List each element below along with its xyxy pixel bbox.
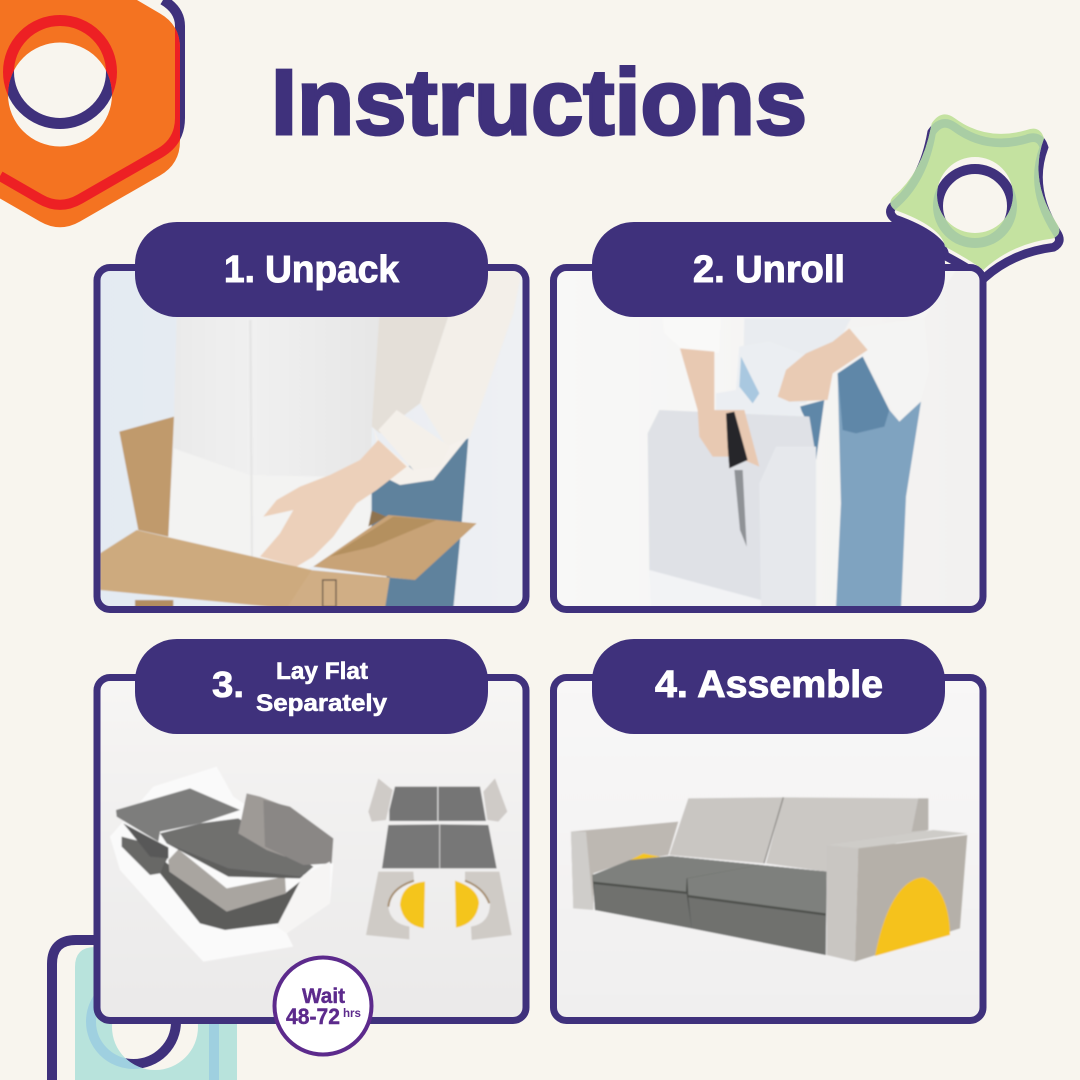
callout: wait 48-72 hrs badge: 48-72 <box>286 1004 340 1029</box>
panel: step 2 unroll <box>553 222 983 610</box>
heading pill: 2. Unroll <box>592 222 945 317</box>
heading pill: 1. Unpack <box>135 222 488 317</box>
photo: assembled sofa <box>557 681 980 963</box>
panel: step 1 unpack <box>97 222 526 610</box>
frame <box>554 268 983 610</box>
heading pill: 4. Assemble <box>592 639 945 734</box>
decoration: teal rounded square <box>52 940 237 1080</box>
heading pill: 3. Lay Flat Separately: Lay Flat <box>276 658 368 685</box>
heading pill: 3. Lay Flat Separately: Separately <box>256 690 388 717</box>
callout: wait 48-72 hrs badge <box>274 958 372 1054</box>
callout: wait 48-72 hrs badge: hrs <box>343 1006 361 1020</box>
heading pill: 3. Lay Flat Separately: 3. <box>212 664 244 705</box>
heading pill: 1. Unpack: 1. Unpack <box>224 249 400 291</box>
frame <box>554 678 983 1020</box>
heading pill: 4. Assemble: 4. Assemble <box>655 664 883 706</box>
frame <box>97 678 526 1020</box>
photo: cutting plastic with scissors <box>553 267 983 610</box>
photo: sofa pieces laid flat <box>100 767 522 1017</box>
callout: wait 48-72 hrs badge: Wait <box>302 985 345 1008</box>
decoration: green star gear <box>890 114 1059 279</box>
panel: step 3 lay flat separately <box>97 639 526 1020</box>
decoration: orange hexagon nut <box>0 0 180 227</box>
title: Instructions <box>271 50 807 154</box>
panel: step 4 assemble <box>553 639 983 1020</box>
frame <box>97 268 526 610</box>
heading pill: 2. Unroll: 2. Unroll <box>693 249 845 291</box>
heading pill: 3. Lay Flat Separately <box>135 639 488 734</box>
photo: unpacking roll from box <box>97 267 526 610</box>
